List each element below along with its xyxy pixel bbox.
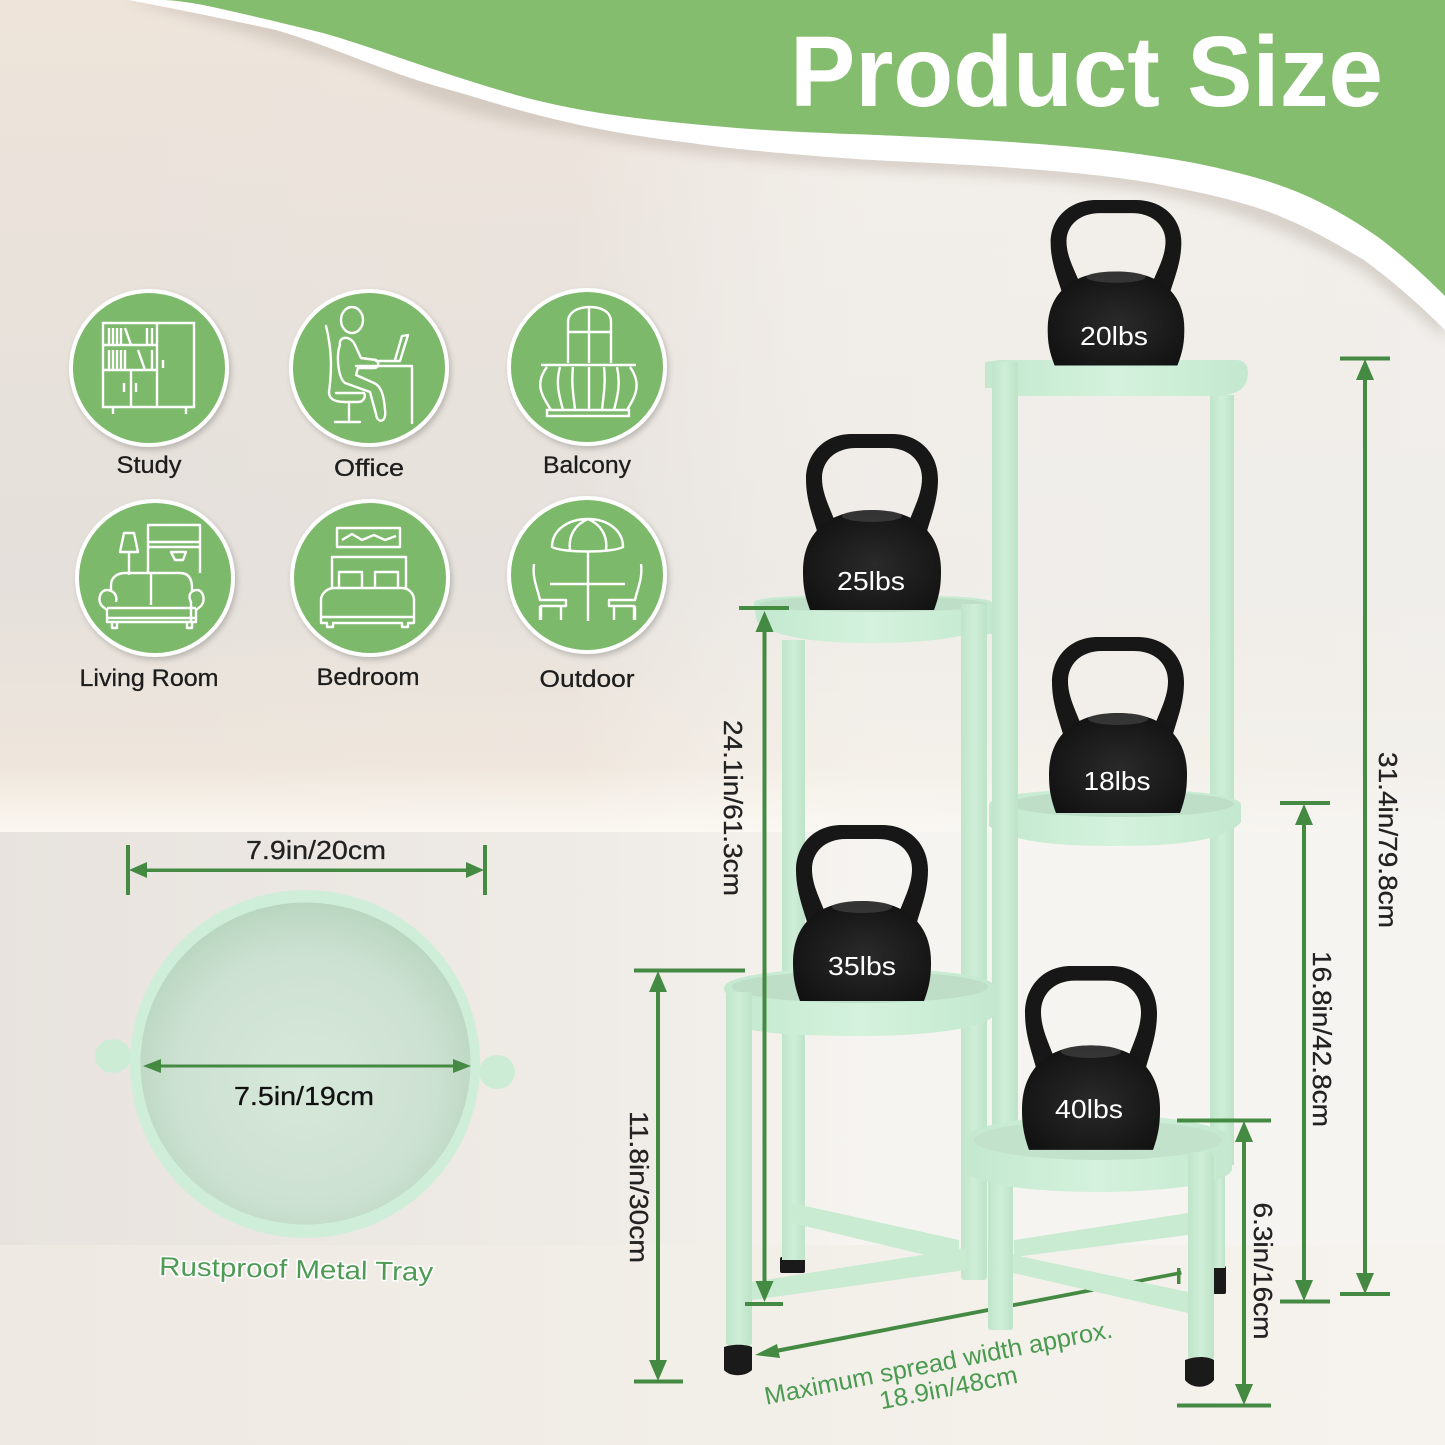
tray: 40lbs tier bbox=[963, 1115, 1232, 1192]
weight: 18lbs bbox=[1049, 637, 1187, 813]
weight: 35lbs bbox=[793, 825, 931, 1001]
tray: top tier bbox=[985, 360, 1248, 396]
dimension: 6.3in tier height: 6.3in/16cm bbox=[1248, 1202, 1278, 1340]
dimension: 31.4in overall height: 31.4in/79.8cm bbox=[1373, 752, 1403, 928]
cross bars bbox=[752, 1203, 1188, 1313]
icon: bedroom: Bedroom bbox=[316, 664, 420, 691]
tray detail bbox=[95, 835, 515, 1287]
icon: study bbox=[71, 291, 227, 479]
weight: 40lbs bbox=[1022, 966, 1160, 1150]
icon: balcony bbox=[509, 290, 665, 479]
tray: 25lbs tier bbox=[754, 595, 992, 656]
rear left post bbox=[782, 640, 805, 1260]
dimension: 16.8in tier height bbox=[1280, 801, 1337, 1304]
rear feet bbox=[780, 1257, 1226, 1294]
dimension: 31.4in overall height bbox=[1340, 356, 1403, 1296]
tray handles bbox=[95, 1039, 515, 1089]
weight: 18lbs: 18lbs bbox=[1084, 766, 1150, 796]
dimension: 11.8in tier height bbox=[624, 968, 745, 1384]
icon: outdoor bbox=[509, 498, 665, 693]
header white swoosh bbox=[129, 0, 1445, 330]
dimension arrow: spread width bbox=[755, 1268, 1182, 1358]
dimension: 16.8in tier height: 16.8in/42.8cm bbox=[1307, 951, 1337, 1127]
icon: office bbox=[291, 291, 447, 482]
weight: 25lbs: 25lbs bbox=[837, 566, 905, 596]
dimension: tray outer width: 7.9in/20cm bbox=[246, 835, 386, 865]
header shadow bbox=[125, 0, 1445, 338]
icon: outdoor: Outdoor bbox=[540, 666, 635, 693]
dimension: tray outer width bbox=[126, 835, 487, 895]
tray: 35lbs tier bbox=[724, 968, 996, 1036]
dimension: 11.8in tier height: 11.8in/30cm bbox=[624, 1111, 654, 1263]
header green banner bbox=[165, 0, 1445, 296]
weight: 35lbs: 35lbs bbox=[828, 951, 896, 981]
icon: living room bbox=[77, 501, 233, 692]
icon: balcony: Balcony bbox=[543, 452, 631, 479]
round tray bbox=[130, 890, 480, 1238]
weight: 20lbs: 20lbs bbox=[1080, 321, 1148, 351]
center rear post bbox=[961, 605, 987, 1280]
rear right post bbox=[1210, 395, 1234, 1268]
tall post bbox=[992, 362, 1018, 1132]
dimension: 24.1in tier height bbox=[718, 606, 789, 1306]
icon: living room: Living Room bbox=[80, 665, 218, 692]
title: Product Size bbox=[790, 16, 1383, 128]
spread width label: 18.9in/48cm bbox=[877, 1361, 1020, 1415]
weight: 25lbs bbox=[803, 434, 941, 610]
front right post bbox=[1188, 1152, 1214, 1360]
room icons grid bbox=[71, 290, 665, 693]
plant stand bbox=[724, 200, 1248, 1387]
dimension: tray inner width bbox=[143, 1059, 471, 1111]
dimension: 6.3in tier height bbox=[1177, 1118, 1278, 1408]
dimension: tray inner width: 7.5in/19cm bbox=[234, 1081, 374, 1111]
icon: study: Study bbox=[116, 452, 182, 479]
center front post bbox=[988, 1180, 1013, 1330]
icon: office: Office bbox=[334, 455, 404, 482]
tray: 18lbs tier bbox=[989, 789, 1241, 846]
weight: 40lbs: 40lbs bbox=[1055, 1094, 1123, 1124]
icon: bedroom bbox=[292, 501, 448, 691]
spread width label: Maximum spread width approx. bbox=[762, 1316, 1115, 1411]
front left post bbox=[726, 992, 752, 1346]
weight: 20lbs bbox=[1048, 200, 1184, 365]
dimension: 24.1in tier height: 24.1in/61.3cm bbox=[718, 720, 748, 896]
tray caption: Rustproof Metal Tray bbox=[159, 1251, 433, 1287]
front feet bbox=[724, 1345, 1214, 1387]
